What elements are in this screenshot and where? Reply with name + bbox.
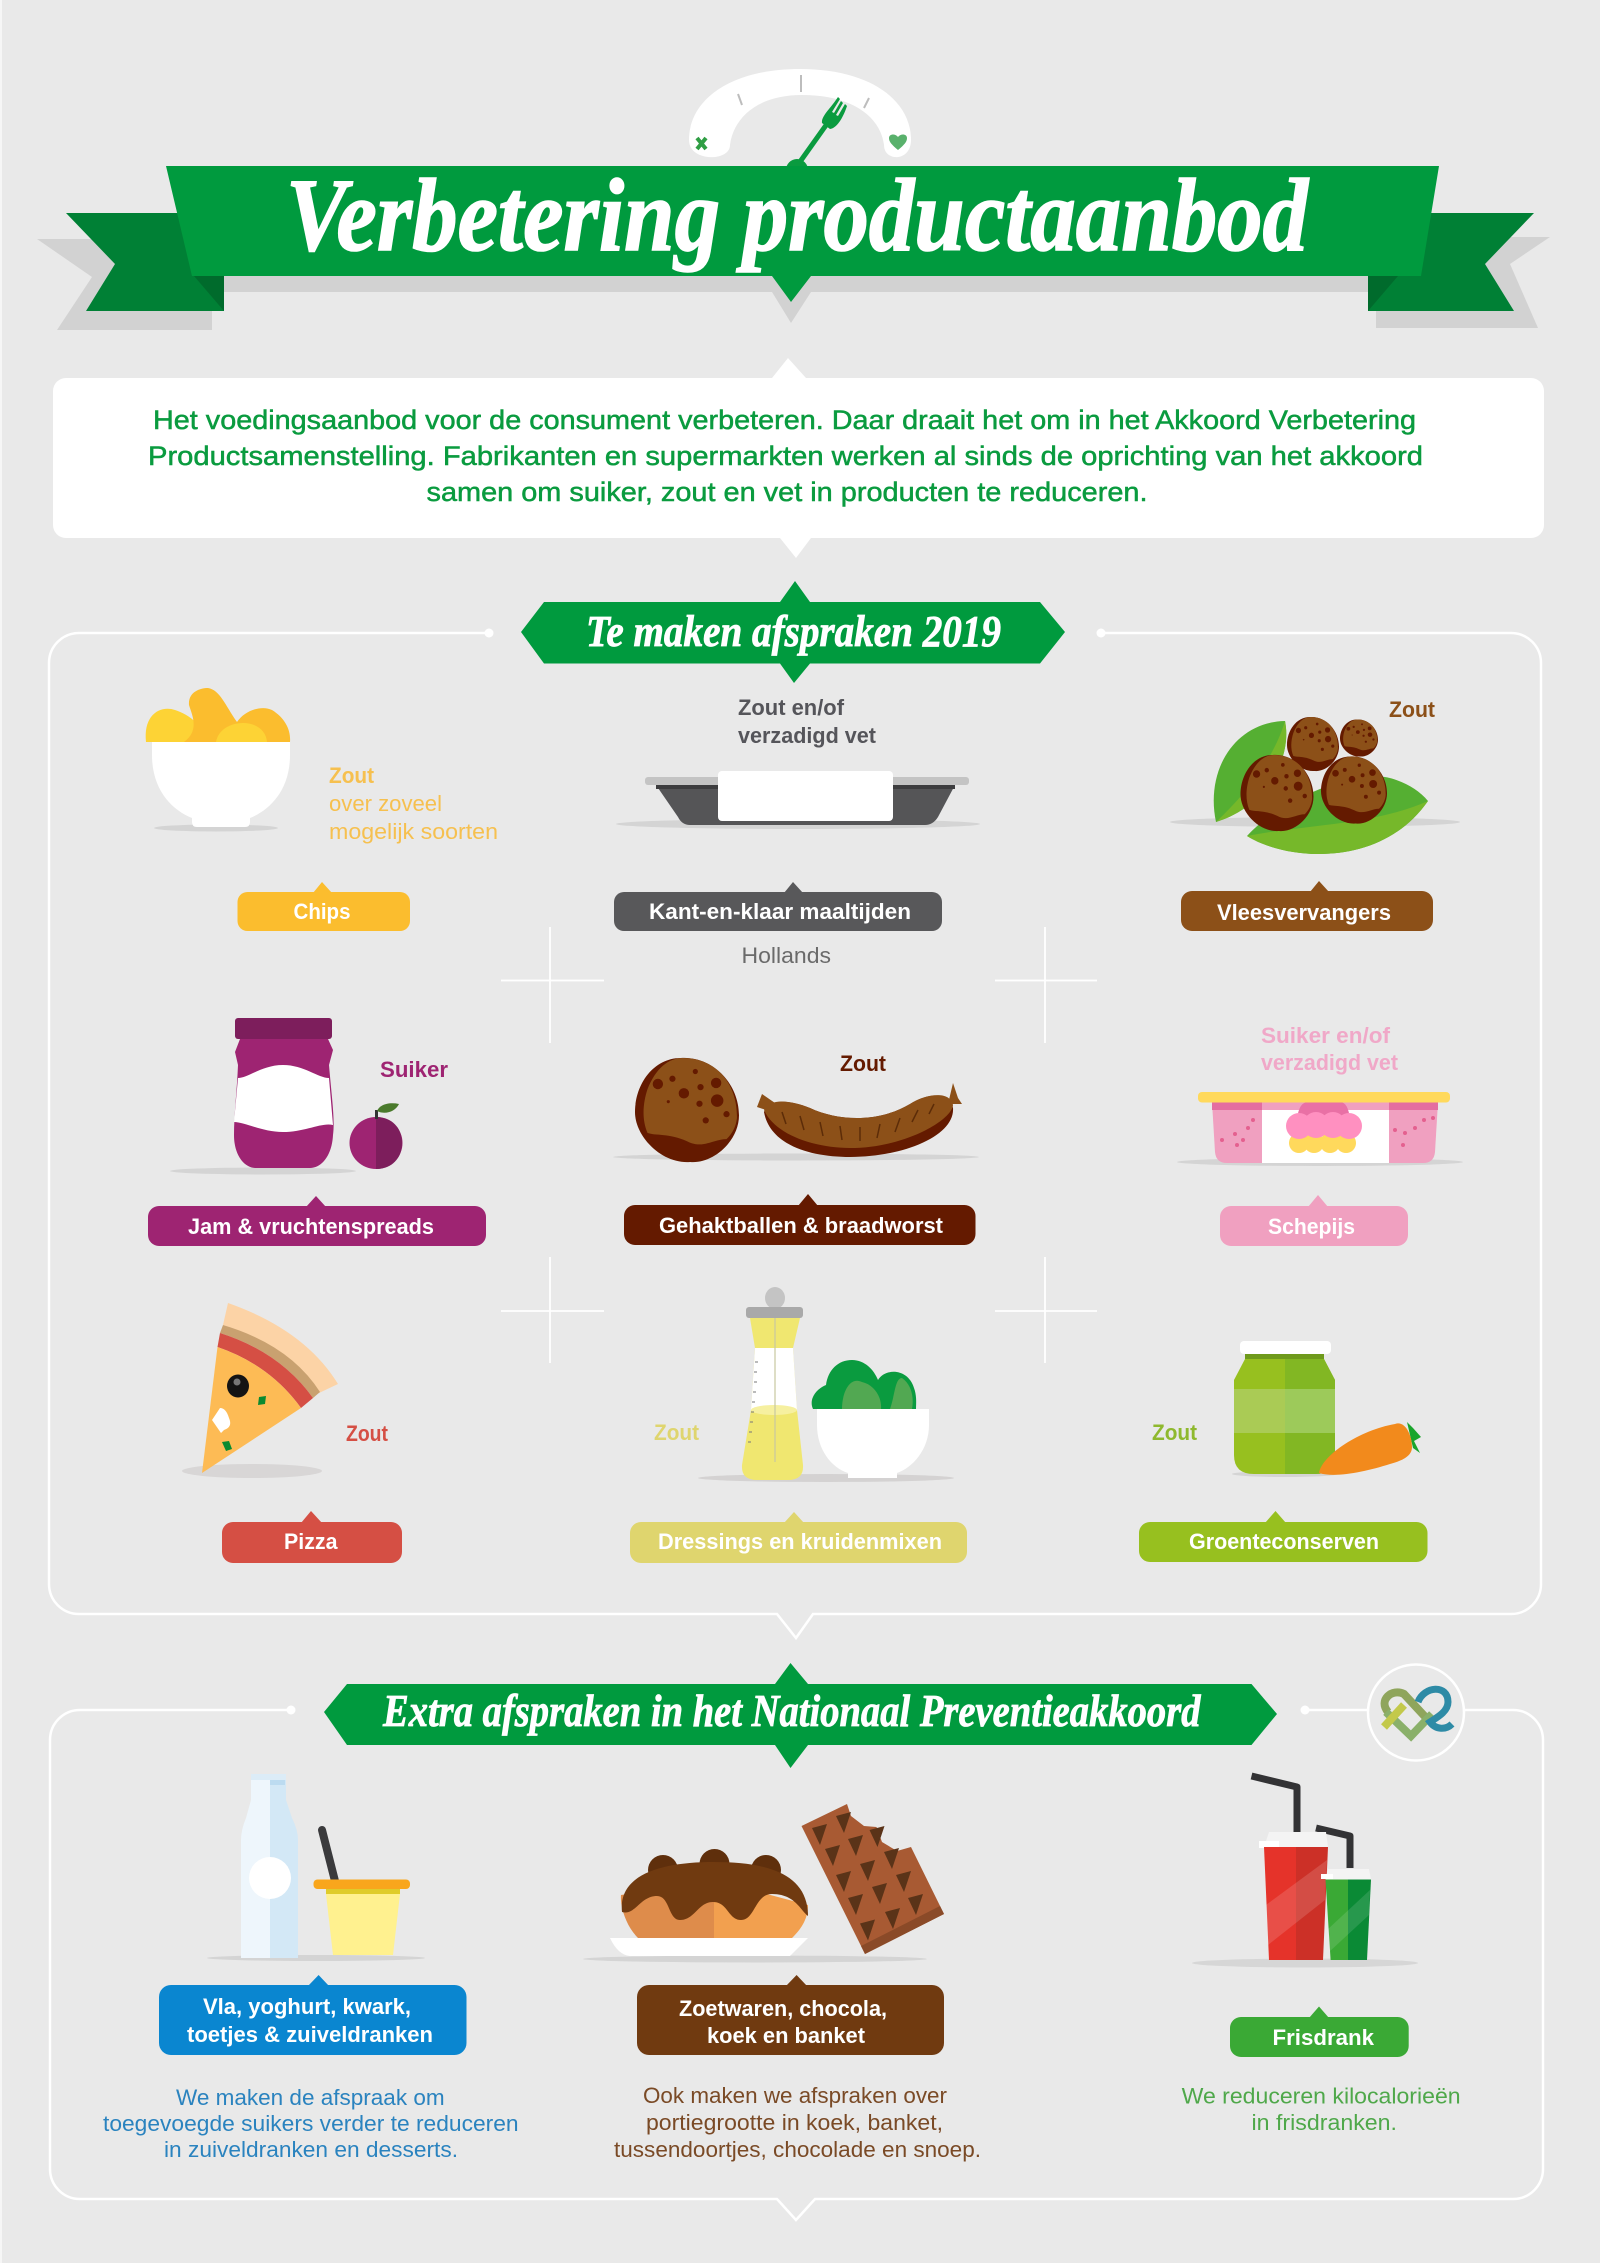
heading: extra afspraken — [324, 1663, 1277, 1768]
label: kant-en-klaar maaltijden: Kant-en-klaar maaltijden — [649, 899, 911, 924]
label: gehaktballen en braadworst — [624, 1194, 976, 1245]
text: zoetwaren description — [614, 2083, 981, 2162]
intro text box: samen om suiker, zout en vet in producten te reduceren. — [426, 477, 1148, 507]
label: gehaktballen en braadworst: Gehaktballen & braadworst — [659, 1213, 944, 1238]
icon: chips bowl — [146, 688, 290, 832]
text: pizza nutrient: Zout — [346, 1421, 389, 1446]
item: jam en vruchtenspreads — [148, 1018, 486, 1246]
intro text box: Het voedingsaanbod voor de consument verbeteren. Daar draait het om in het Akkoord Verbetering — [153, 405, 1416, 435]
text: zuivel description: in zuiveldranken en desserts. — [164, 2137, 458, 2162]
gauge with fork — [689, 69, 911, 181]
icon: jam jar and plum — [170, 1018, 402, 1174]
label: schepijs: Schepijs — [1268, 1214, 1355, 1239]
item: groenteconserven — [1139, 1341, 1428, 1562]
panel: extra afspraken frame — [50, 1706, 1543, 2220]
label: zuivel — [159, 1975, 466, 2055]
text: jam nutrient: Suiker — [380, 1057, 448, 1082]
item: zoetwaren — [583, 1804, 981, 2162]
text: frisdrank description: We reduceren kilocalorieën — [1182, 2084, 1461, 2108]
text: zuivel description — [103, 2085, 519, 2162]
label: chips: Chips — [294, 899, 350, 924]
text: chips nutrient: mogelijk soorten — [329, 819, 498, 844]
text: chips nutrient: Zout — [329, 763, 375, 788]
label: zoetwaren — [637, 1975, 944, 2055]
text: gehakt nutrient: Zout — [840, 1051, 887, 1076]
heading: extra afspraken: Extra afspraken in het Nationaal Preventieakkoord — [382, 1685, 1201, 1736]
item: frisdrank — [1182, 1776, 1461, 2135]
label: jam en vruchtenspreads: Jam & vruchtenspreads — [188, 1214, 434, 1239]
text: schepijs nutrient: verzadigd vet — [1261, 1050, 1399, 1075]
text: hollands: Hollands — [742, 943, 831, 968]
text: frisdrank description — [1182, 2084, 1461, 2135]
label: chips — [238, 882, 410, 931]
text: vleesvervangers nutrient: Zout — [1389, 697, 1436, 722]
text: schepijs nutrient — [1261, 1023, 1399, 1075]
icon: vegetable jar and carrot — [1232, 1341, 1421, 1477]
icon: ready meal tray — [616, 771, 980, 829]
label: vleesvervangers — [1181, 881, 1433, 931]
label: frisdrank: Frisdrank — [1272, 2025, 1375, 2050]
icon: milk bottle and dessert cup — [207, 1774, 425, 1961]
item: gehaktballen en braadworst — [613, 1051, 979, 1245]
label: zoetwaren: Zoetwaren, chocola, — [679, 1996, 887, 2021]
icon: dressing bottle and salad bowl — [698, 1287, 954, 1482]
label: pizza: Pizza — [284, 1529, 338, 1554]
icon: cake and chocolate bar — [583, 1804, 944, 1962]
panel: te maken afspraken frame — [49, 628, 1541, 1638]
text: ready meal nutrient — [738, 695, 877, 748]
icon: preventieakkoord heart logo — [1368, 1664, 1464, 1760]
icon: meatball and sausage — [613, 1058, 979, 1162]
item: kant-en-klaar maaltijden — [614, 695, 980, 968]
label: kant-en-klaar maaltijden — [614, 882, 942, 931]
item: vleesvervangers — [1170, 697, 1460, 931]
text: schepijs nutrient: Suiker en/of — [1261, 1023, 1391, 1048]
label: groenteconserven — [1139, 1511, 1428, 1562]
text: zuivel description: toegevoegde suikers verder te reduceren — [103, 2111, 519, 2136]
text: dressings nutrient: Zout — [654, 1420, 700, 1445]
text: zoetwaren description: Ook maken we afspraken over — [643, 2083, 947, 2108]
label: zuivel: Vla, yoghurt, kwark, — [203, 1994, 411, 2019]
label: frisdrank — [1230, 2006, 1409, 2057]
item: pizza — [182, 1303, 402, 1563]
item: schepijs — [1177, 1023, 1463, 1246]
text: chips nutrient: over zoveel — [329, 791, 442, 816]
title: Verbetering productaanbod — [286, 158, 1310, 273]
icon: ice cream tub — [1177, 1092, 1463, 1166]
text: zoetwaren description: tussendoortjes, chocolade en snoep. — [614, 2137, 981, 2162]
text: ready meal nutrient: verzadigd vet — [738, 723, 877, 748]
item: dressings en kruidenmixen — [630, 1287, 967, 1563]
label: groenteconserven: Groenteconserven — [1189, 1529, 1379, 1554]
item: zuivel — [103, 1774, 519, 2162]
text: chips nutrient — [329, 763, 498, 844]
text: groente nutrient: Zout — [1152, 1420, 1198, 1445]
label: schepijs — [1220, 1195, 1408, 1246]
intro text box: Productsamenstelling. Fabrikanten en supermarkten werken al sinds de oprichting van het akkoord — [148, 441, 1423, 471]
text: frisdrank description: in frisdranken. — [1252, 2110, 1397, 2135]
text: zuivel description: We maken de afspraak om — [176, 2085, 445, 2110]
label: jam en vruchtenspreads — [148, 1196, 486, 1246]
title banner — [37, 158, 1550, 330]
label: vleesvervangers: Vleesvervangers — [1217, 900, 1391, 925]
intro text box — [53, 358, 1544, 558]
text: ready meal nutrient: Zout en/of — [738, 695, 845, 720]
heading: te maken afspraken 2019: Te maken afspraken 2019 — [586, 607, 1001, 656]
item: chips — [146, 688, 498, 931]
label: zoetwaren: koek en banket — [707, 2023, 866, 2048]
label: dressings en kruidenmixen — [630, 1512, 967, 1563]
icon: pizza slice — [182, 1303, 338, 1478]
heading: te maken afspraken 2019 — [521, 581, 1065, 683]
text: zoetwaren description: portiegrootte in koek, banket, — [646, 2110, 943, 2135]
icon: soft drink cups — [1192, 1776, 1418, 1968]
label: zuivel: toetjes & zuiveldranken — [187, 2022, 433, 2047]
icon: meat substitute balls on leaves — [1170, 717, 1460, 854]
label: pizza — [222, 1511, 402, 1563]
label: dressings en kruidenmixen: Dressings en kruidenmixen — [658, 1529, 942, 1554]
